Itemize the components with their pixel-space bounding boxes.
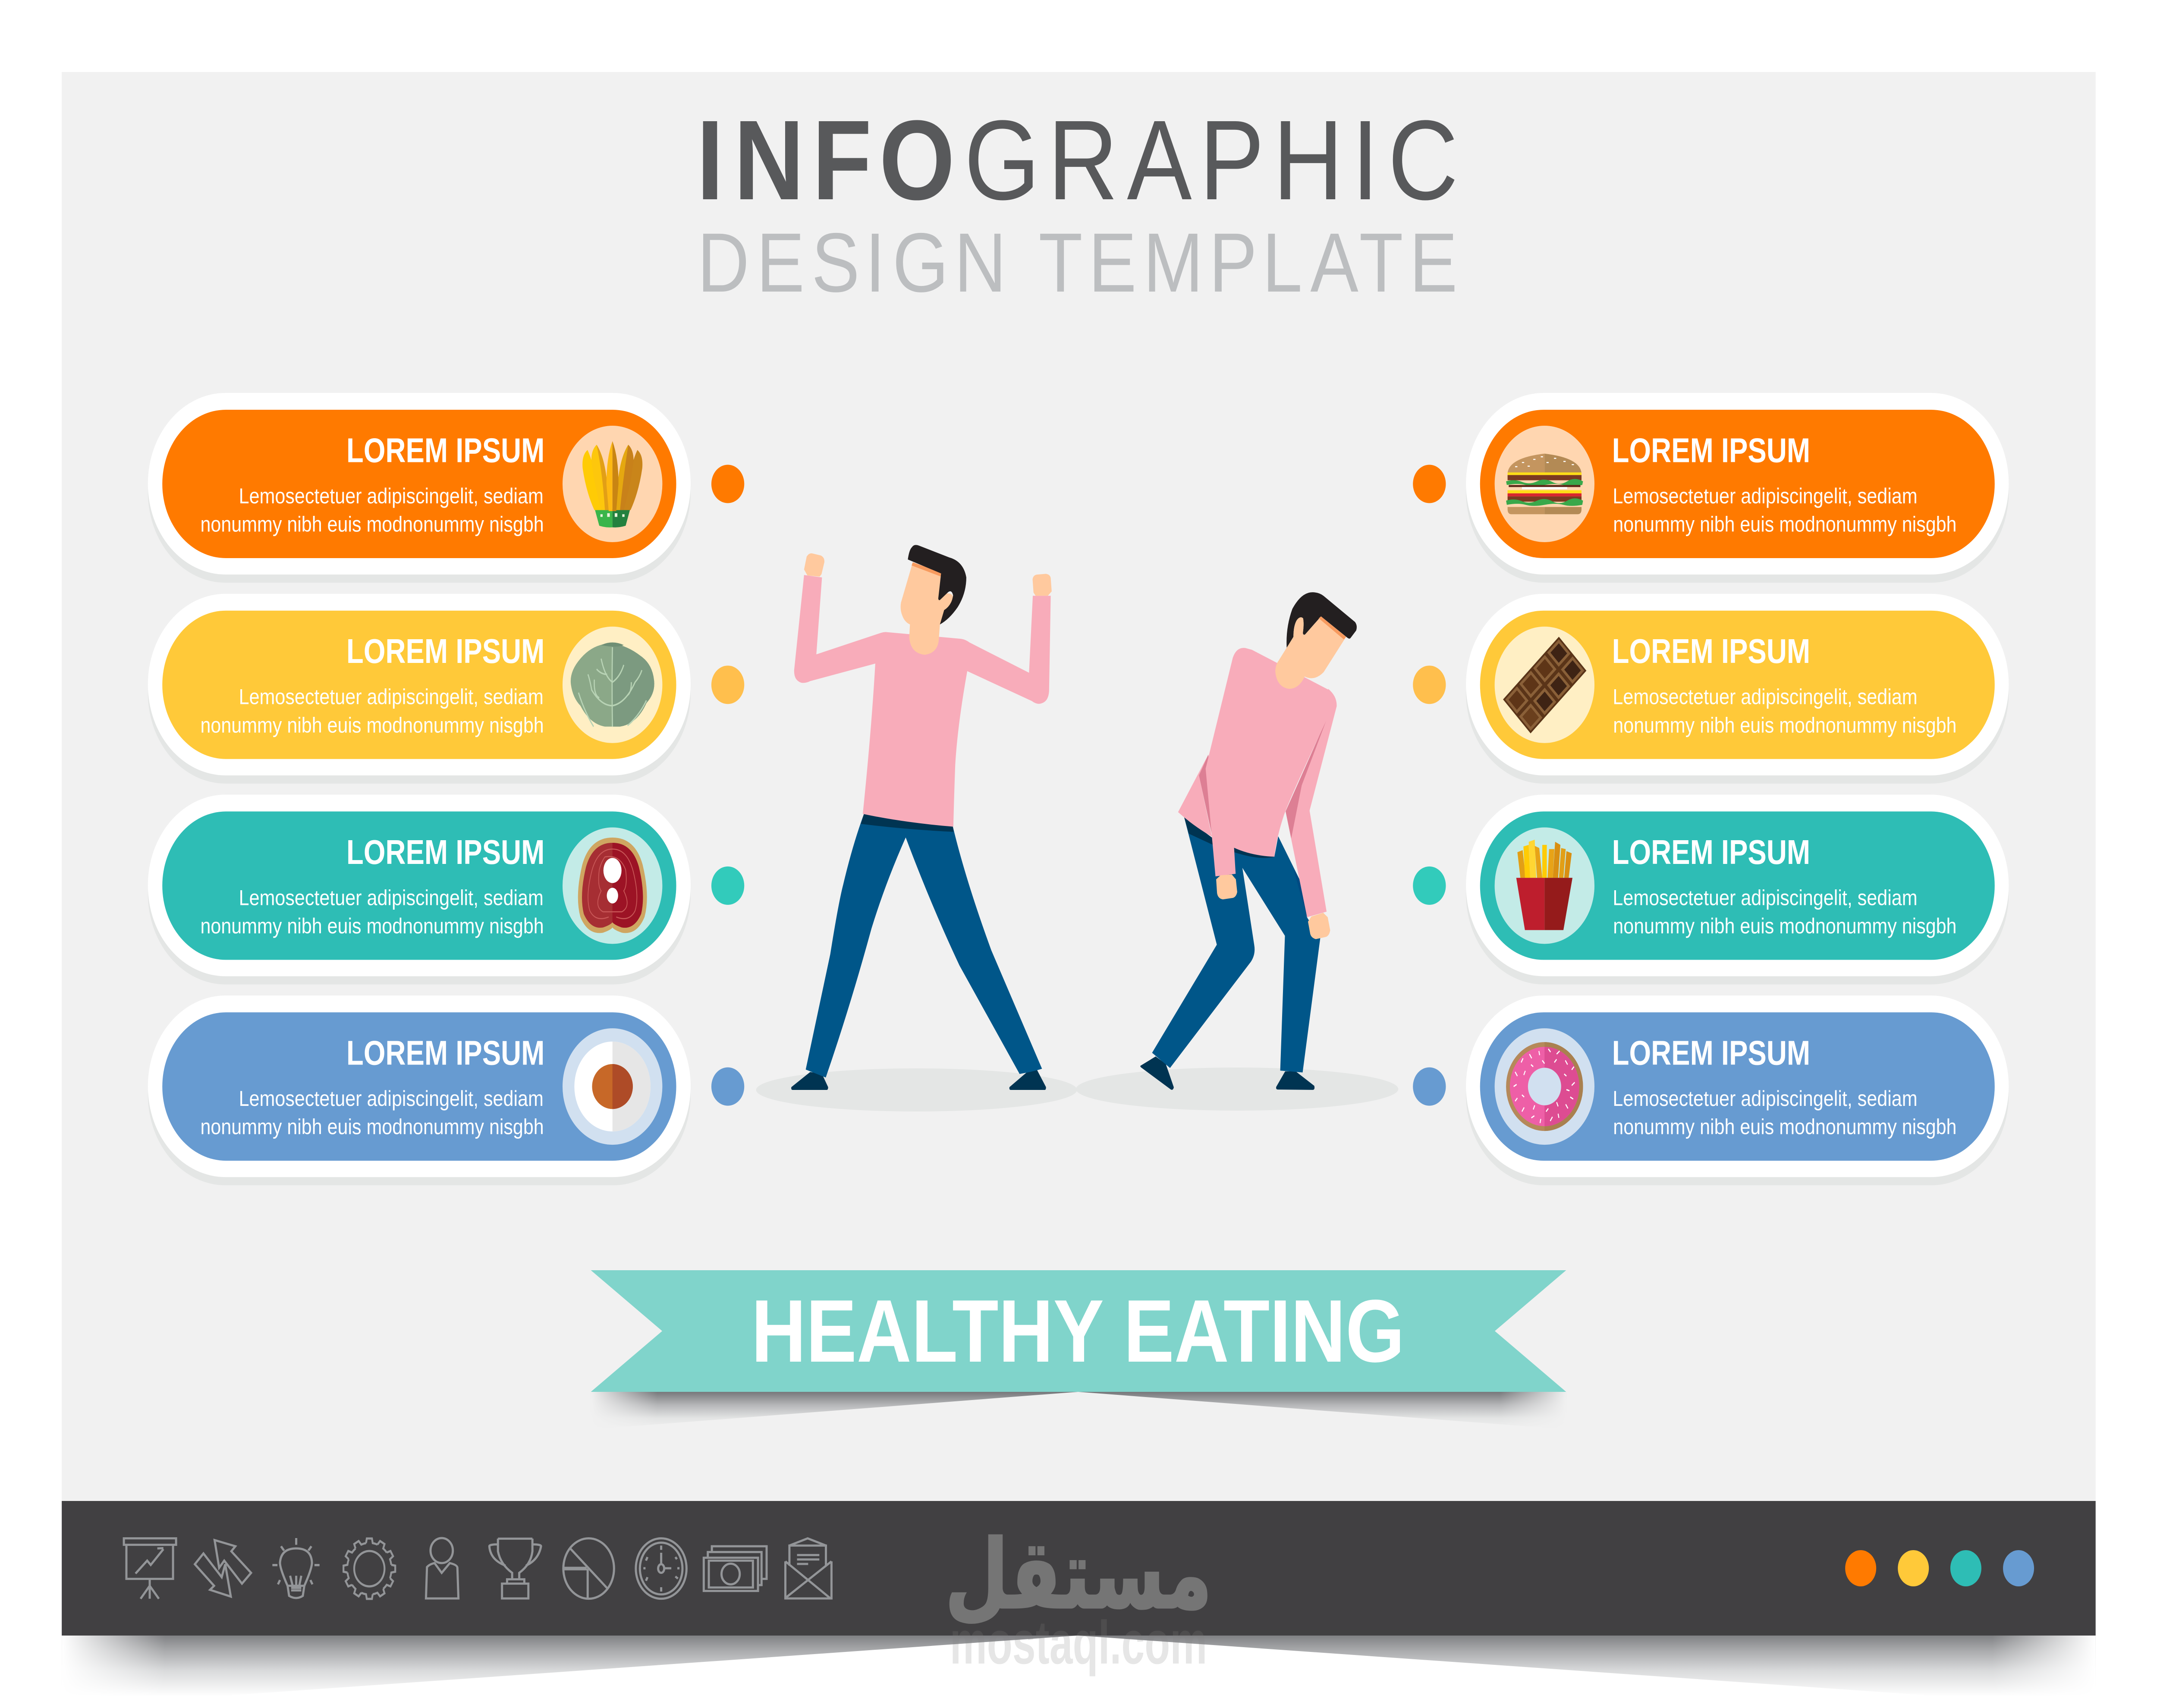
text block: nonummy nibh euis modnonummy nisgbh xyxy=(201,1115,544,1139)
panel shadow xyxy=(62,1636,2096,1708)
panel: left card 1 orange xyxy=(148,393,691,583)
text block: nonummy nibh euis modnonummy nisgbh xyxy=(201,914,544,938)
footer colour dots xyxy=(1845,1550,2034,1586)
text block: LOREM IPSUM xyxy=(1612,431,1810,470)
icon: french fries xyxy=(1516,840,1572,930)
text block: nonummy nibh euis modnonummy nisgbh xyxy=(201,713,544,737)
icon: fried egg plate xyxy=(574,1042,651,1131)
icon: chocolate bar xyxy=(1503,637,1586,733)
text block: Lemosectetuer adipiscingelit, sediam xyxy=(1613,685,1918,709)
text block xyxy=(1612,833,1956,938)
banner shadow xyxy=(591,1392,1566,1431)
icon: clock xyxy=(636,1538,686,1599)
watermark logo: Arabic wordmark: مستقل xyxy=(945,1520,1212,1630)
text block xyxy=(201,431,544,536)
text block: LOREM IPSUM xyxy=(346,431,544,470)
panel: right card 2 yellow xyxy=(1466,594,2009,784)
text block: nonummy nibh euis modnonummy nisgbh xyxy=(1613,713,1956,737)
text block: LOREM IPSUM xyxy=(1612,632,1810,670)
text block xyxy=(201,1034,544,1139)
panel: main light background xyxy=(62,72,2096,1504)
figure: healthy strong man xyxy=(791,545,1052,1090)
text block: nonummy nibh euis modnonummy nisgbh xyxy=(201,512,544,536)
ground shadow: left figure xyxy=(756,1068,1077,1111)
text block: LOREM IPSUM xyxy=(346,833,544,871)
icon: light bulb xyxy=(272,1538,320,1598)
connector dots: right column xyxy=(1413,465,1446,1106)
panel: right card 4 blue xyxy=(1466,995,2009,1185)
panel: right card 3 teal xyxy=(1466,794,2009,984)
text block xyxy=(201,833,544,938)
icon row: footer line icons xyxy=(124,1538,831,1599)
text block: LOREM IPSUM xyxy=(346,632,544,670)
icon: corn xyxy=(582,441,642,527)
text block: LOREM IPSUM xyxy=(346,1034,544,1072)
icon: money stack xyxy=(704,1546,767,1591)
icon: steak xyxy=(578,838,647,933)
icon: exchange arrows xyxy=(195,1540,251,1597)
watermark: mostaql.com: mostaql.com xyxy=(950,1608,1207,1677)
figure: unhealthy hunched man xyxy=(1140,592,1357,1090)
icon: presentation board xyxy=(124,1538,176,1599)
banner: HEALTHY EATING: HEALTHY EATING xyxy=(751,1281,1405,1381)
text block xyxy=(1612,632,1956,737)
icon: pie chart xyxy=(563,1538,614,1599)
icon: burger xyxy=(1506,454,1583,514)
text block xyxy=(201,632,544,737)
text block: nonummy nibh euis modnonummy nisgbh xyxy=(1613,1115,1956,1139)
panel: left card 2 yellow xyxy=(148,594,691,784)
panel: left card 3 teal xyxy=(148,794,691,984)
text block: Lemosectetuer adipiscingelit, sediam xyxy=(1613,885,1918,910)
connector dots: left column xyxy=(711,465,744,1106)
text block xyxy=(1612,431,1956,536)
title xyxy=(697,97,1458,310)
text block xyxy=(1612,1034,1956,1139)
footer bar xyxy=(62,1501,2096,1636)
ground shadow: right figure xyxy=(1076,1068,1398,1111)
text block: Lemosectetuer adipiscingelit, sediam xyxy=(1613,1086,1918,1111)
text block: nonummy nibh euis modnonummy nisgbh xyxy=(1613,914,1956,938)
subtitle: DESIGN TEMPLATE: DESIGN TEMPLATE xyxy=(697,216,1458,310)
panel: right card 1 orange xyxy=(1466,393,2009,583)
banner: HEALTHY EATING xyxy=(591,1270,1566,1392)
text block: Lemosectetuer adipiscingelit, sediam xyxy=(239,484,544,508)
icon: envelope with letter xyxy=(785,1538,831,1598)
icon: trophy xyxy=(489,1538,541,1598)
text block: Lemosectetuer adipiscingelit, sediam xyxy=(1613,484,1918,508)
text block: LOREM IPSUM xyxy=(1612,833,1810,871)
icon: cabbage xyxy=(571,643,654,727)
text block: Lemosectetuer adipiscingelit, sediam xyxy=(239,885,544,910)
text block: Lemosectetuer adipiscingelit, sediam xyxy=(239,1086,544,1111)
icon: donut xyxy=(1506,1042,1583,1131)
icon: footer gear xyxy=(343,1538,396,1600)
text block: nonummy nibh euis modnonummy nisgbh xyxy=(1613,512,1956,536)
title line: INFOGRAPHIC: GRAPHIC xyxy=(964,97,1458,223)
panel: left card 4 blue xyxy=(148,995,691,1185)
icon: person xyxy=(426,1538,459,1598)
title line: INFOGRAPHIC: INFO xyxy=(697,97,955,223)
text block: LOREM IPSUM xyxy=(1612,1034,1810,1072)
text block: Lemosectetuer adipiscingelit, sediam xyxy=(239,685,544,709)
